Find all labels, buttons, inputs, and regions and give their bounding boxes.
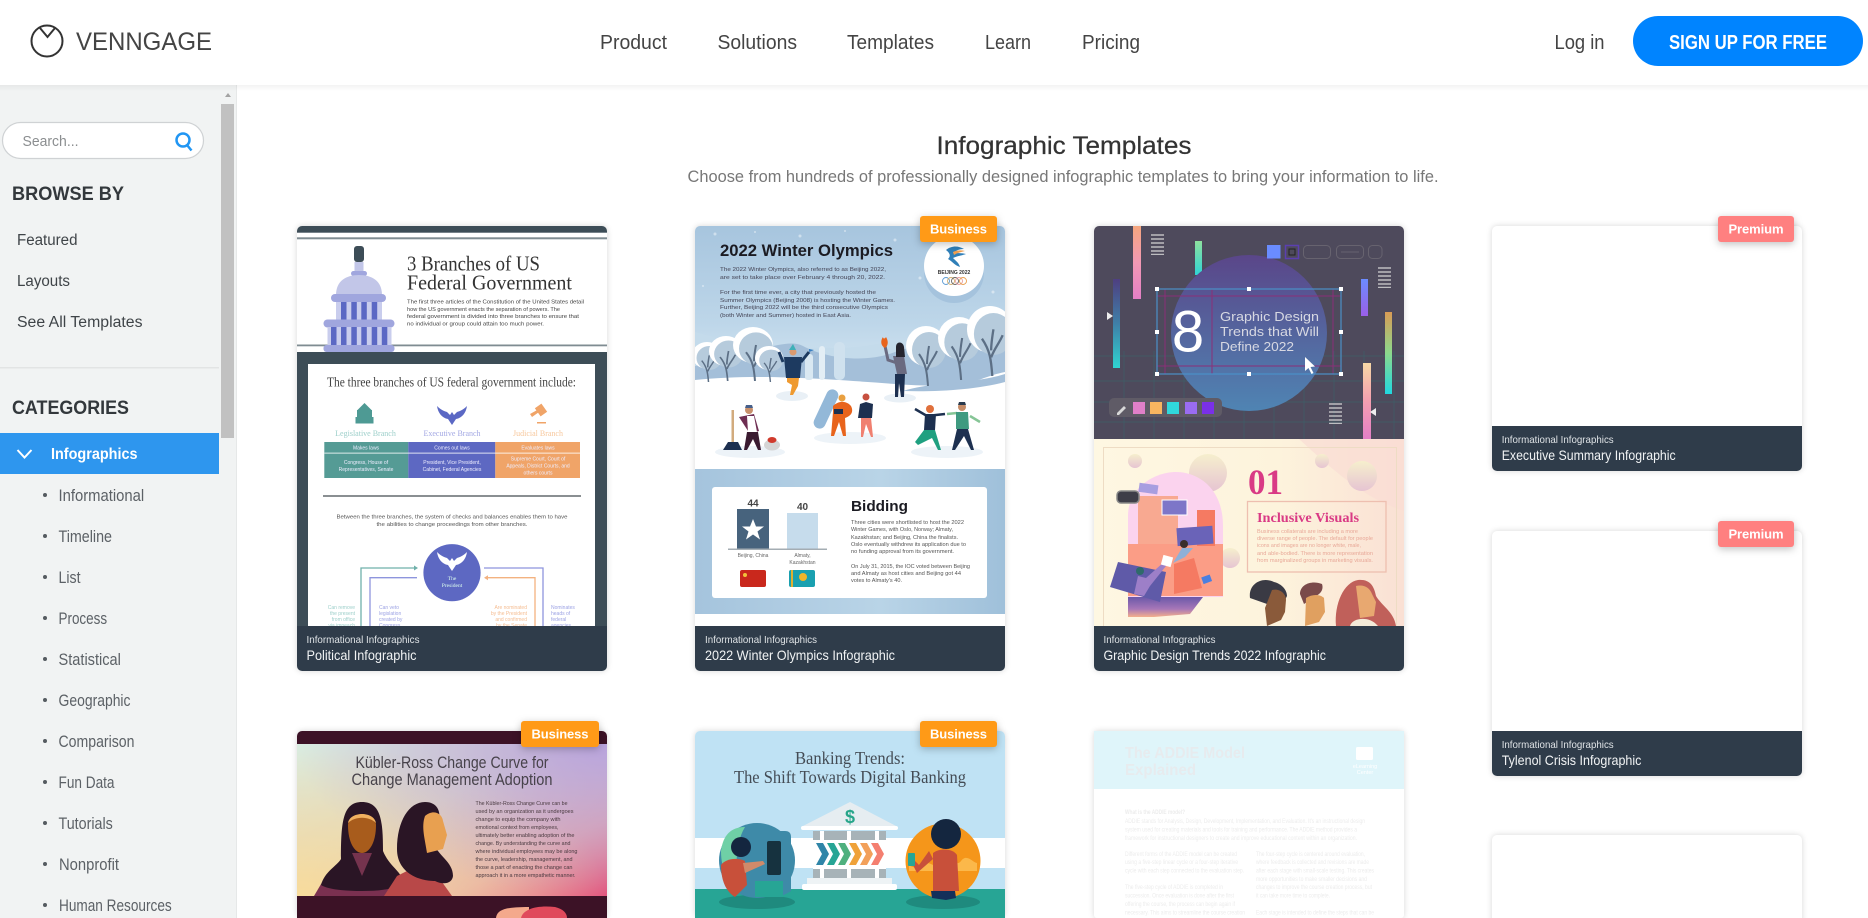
chevrons <box>816 843 884 865</box>
flow labels: via impeach <box>328 623 355 629</box>
poster body text: more opportunities to make smaller decisions and <box>1256 877 1367 883</box>
badge: premium <box>1718 521 1794 547</box>
poster body text: changes to improve the course creation process, but <box>1256 885 1372 891</box>
selection frame <box>1155 287 1343 376</box>
bidding text: Kazakhstan; and Beijing, China the finalists. <box>851 535 958 541</box>
branch labels: Judicial Branch <box>513 429 563 438</box>
heading: browse by: BROWSE BY <box>12 184 124 205</box>
badge: premium: Premium <box>1728 526 1784 542</box>
lower poster section <box>1094 439 1404 638</box>
icon: magnifier <box>176 134 192 150</box>
poster body text <box>1125 810 1375 916</box>
poster title: The ADDIE Model <box>1125 745 1245 762</box>
poster title <box>352 753 552 789</box>
poster title: 2022 Winter Olympics <box>720 241 893 260</box>
gradient disc <box>1171 255 1327 411</box>
flow labels: Congress <box>379 623 401 629</box>
poster title: 3 Branches of US <box>407 252 540 276</box>
caption: Informational Infographics <box>1502 434 1614 446</box>
flow labels: Can veto <box>379 605 399 611</box>
spheres <box>1128 454 1377 568</box>
browse links: Layouts <box>17 273 70 290</box>
poster paragraph: change. By understanding the curve and <box>476 841 571 847</box>
branch labels: Legislative Branch <box>335 429 396 438</box>
poster title: Banking Trends: <box>795 748 905 768</box>
page subtitle: Choose from hundreds of professionally designed infographic templates to bring your information to life. <box>688 167 1438 186</box>
hatch icons <box>1151 235 1391 424</box>
bar chart: Kazakhstan <box>789 560 816 566</box>
nav links: Templates <box>847 32 934 54</box>
curling player <box>715 405 785 458</box>
card art header <box>1094 731 1404 789</box>
sign up button: SIGN UP FOR FREE <box>1669 32 1827 54</box>
active category: infographics <box>0 433 219 474</box>
poster body text: succession. Once evaluation is done after the first <box>1125 894 1234 900</box>
flow labels: legislation <box>379 611 401 617</box>
poster intro text <box>720 267 895 319</box>
caption: Informational Infographics <box>306 634 420 646</box>
bidding text: and Almaty as host cities and Beijing got 44 <box>851 571 961 577</box>
poster body text: Different forms of the ADDIE model can be created <box>1125 852 1237 858</box>
caption <box>1492 731 1802 776</box>
customer at atm <box>719 823 795 898</box>
branch table: Comes out laws <box>434 446 470 452</box>
nav links: Product <box>600 32 667 54</box>
text box <box>1248 502 1386 572</box>
ground shadows <box>719 895 980 909</box>
logo wordmark: VENNGAGE <box>76 28 212 56</box>
woman in hood <box>314 802 403 896</box>
president circle: President <box>442 583 463 589</box>
nav links: Pricing <box>1082 32 1140 54</box>
flow labels: by the Senate <box>496 623 527 629</box>
badge: business <box>521 721 599 747</box>
caption: Tylenol Crisis Infographic <box>1502 752 1641 768</box>
top navigation bar <box>0 0 1868 91</box>
text box: Business collaterals are including a more <box>1257 529 1358 535</box>
poster title <box>734 748 966 787</box>
poster body text: The four-step cycle is centered around evaluation, <box>1256 852 1365 858</box>
branch labels <box>335 430 563 438</box>
poster title: Kübler-Ross Change Curve for <box>356 753 549 772</box>
portrait heads <box>1250 580 1396 626</box>
poster body text: cycle with each step connected to the evaluation step. <box>1125 868 1244 874</box>
category list: Timeline <box>58 528 112 546</box>
poster paragraph: used by an organization as it undergoes <box>476 809 574 815</box>
card: political infographic <box>297 226 607 671</box>
flow arrows <box>361 568 543 626</box>
beijing 2022 logo <box>924 236 984 303</box>
card art: change curve poster <box>297 731 607 918</box>
category list: Fun Data <box>58 774 115 792</box>
bidding text: votes to Almaty's 40. <box>851 578 902 584</box>
flow labels: federal <box>551 617 566 623</box>
colour palette <box>1109 398 1222 417</box>
bank building <box>801 802 898 890</box>
white content panel: The three branches of US federal government include: <box>327 374 576 390</box>
sign up button <box>1633 16 1863 66</box>
poster intro text: For the first time ever, a city that previously hosted the <box>720 290 876 296</box>
search box <box>2 122 204 158</box>
flow labels: agencies <box>551 623 572 629</box>
card art: design trends poster <box>1094 226 1404 638</box>
category list: Tutorials <box>58 815 113 833</box>
lower illustration fragment <box>496 906 567 918</box>
card: graphic design trends infographic <box>1094 226 1404 671</box>
checks and balances text: the abilities to change proceedings from other branches. <box>376 522 528 528</box>
trees <box>692 306 1013 386</box>
icon: capitol building <box>324 246 394 352</box>
category list: Informational <box>58 487 144 505</box>
branch table: Makes laws <box>353 446 380 452</box>
big numeral: 8 <box>1172 300 1204 364</box>
president circle: The <box>448 576 457 582</box>
branch table <box>324 442 580 478</box>
bar chart: Beijing, China <box>738 553 769 559</box>
nav links <box>600 32 1140 54</box>
browse links <box>17 232 143 331</box>
browse links: See All Templates <box>17 314 143 331</box>
white content panel <box>308 364 595 629</box>
branch table: Representatives, Senate <box>339 467 394 473</box>
poster paragraph: where individual employees may be along <box>476 849 578 855</box>
poster title: Graphic Design <box>1220 309 1319 324</box>
text box: and able-bodied. There is more representation <box>1257 551 1373 557</box>
caption <box>1094 626 1404 671</box>
poster intro text: no individual or group could attain too much power. <box>407 321 544 327</box>
poster paragraph: The Kübler-Ross Change Curve can be <box>476 801 568 807</box>
caption: Informational Infographics <box>705 634 817 646</box>
poster body text: ADDIE stands for Analysis, Design, Development, Implementation, and Evaluation. It's an instructional design <box>1125 819 1365 825</box>
poster body text: it can take more time to complete. <box>1256 894 1330 900</box>
bidding text: no funding approval from its government. <box>851 549 954 555</box>
torch bearer <box>881 337 916 402</box>
icon: elearning center <box>1353 747 1377 776</box>
checks and balances text <box>336 514 568 528</box>
poster paragraph: ultimately better enabling adoption of the <box>476 833 575 839</box>
bar chart: Almaty, <box>794 553 811 559</box>
poster intro text: The first three articles of the Constitution of the United States detail <box>407 300 584 306</box>
nav links: Solutions <box>718 32 797 54</box>
poster intro text: how the US government enacts the separation of powers. The <box>407 307 560 313</box>
poster body text: after each stage with small-scale testing. This creates <box>1256 868 1374 874</box>
poster intro text: Further, Beijing 2022 will be the third consecutive Olympics <box>720 305 888 311</box>
poster title <box>408 256 572 290</box>
poster title: Federal Government <box>407 270 572 294</box>
bidding text <box>851 520 970 584</box>
card: 2022 winter olympics infographic <box>692 216 1013 671</box>
bar chart <box>728 498 827 566</box>
category list: Geographic <box>58 692 130 710</box>
branch table: President, Vice President, <box>423 460 481 466</box>
caption <box>1492 426 1802 471</box>
poster body text: Each stage is intended to define the steps that can be <box>1256 910 1375 916</box>
caption: 2022 Winter Olympics Infographic <box>705 647 895 663</box>
icon: legislative <box>356 403 374 424</box>
card: ADDIE model (fading in) <box>1094 731 1404 918</box>
bank building: $ <box>845 807 855 827</box>
flow labels: from office <box>332 617 355 623</box>
flow labels: Can remove <box>328 605 355 611</box>
branch table: Appeals, District Courts, and <box>506 464 570 470</box>
checks and balances text: Between the three branches, the system of checks and balances enables them to have <box>336 514 568 520</box>
card: banking trends <box>695 721 1005 918</box>
president circle <box>423 544 481 601</box>
badge: premium <box>1718 216 1794 242</box>
poster intro text <box>407 300 584 327</box>
bidding text: Winter Games, with Oslo, Norway; Almaty, <box>851 527 953 533</box>
grid lines <box>1094 351 1404 439</box>
badge: business: Business <box>930 222 987 236</box>
badge: premium: Premium <box>1728 222 1784 236</box>
card: blank loading template <box>1492 835 1802 918</box>
card: kubler-ross change curve <box>297 721 607 918</box>
branch table: Supreme Court, Court of <box>511 456 566 462</box>
poster paragraph: those a part of enacting the change can <box>476 865 573 871</box>
category list: Nonprofit <box>59 856 119 874</box>
flow labels: the present <box>330 611 356 617</box>
flow labels: created by <box>379 617 403 623</box>
poster paragraph <box>476 801 578 879</box>
poster intro text: federal government is divided into three branches to ensure that <box>407 314 580 320</box>
card: executive summary infographic <box>1492 216 1802 471</box>
beijing 2022 logo: BEIJING 2022 <box>938 270 970 276</box>
sidebar <box>0 85 237 918</box>
bidding text: Oslo eventually withdrew its application due to <box>851 542 966 548</box>
skier with raised arms <box>776 344 814 401</box>
flow labels <box>328 605 575 626</box>
category list: Human Resources <box>59 897 172 915</box>
poster body text: system used for creating materials and tools for training and performance. The ADDIE method provides a <box>1125 828 1358 834</box>
caption: Graphic Design Trends 2022 Infographic <box>1104 647 1326 663</box>
snowy hills <box>695 344 1005 392</box>
icon: elearning center: eLearning <box>1353 764 1377 770</box>
poster body text: framework for instructional designers to create and improve educational content within an organization. <box>1125 836 1357 842</box>
flag: kazakhstan <box>789 570 815 587</box>
poster intro text: are set to take place over February 4 through 20, 2022. <box>720 275 886 281</box>
poster title: Explained <box>1125 762 1196 779</box>
flag: china <box>740 570 766 587</box>
caption: Informational Infographics <box>1104 634 1216 646</box>
heading: categories: CATEGORIES <box>12 398 129 419</box>
caption <box>695 626 1005 671</box>
poster body text: where feedback is collected and revisions are made <box>1255 860 1370 866</box>
snowboard pair <box>812 387 886 444</box>
poster body text: necessary. This aims to streamline the course creation <box>1125 910 1245 916</box>
badge: business: Business <box>532 726 588 742</box>
icon: judicial gavel <box>530 404 547 424</box>
icon: executive eagle <box>437 406 467 425</box>
bidding text: On July 31, 2015, the IOC voted between Beijing <box>851 564 970 570</box>
active category: infographics: Infographics <box>51 446 138 463</box>
caption: Executive Summary Infographic <box>1502 447 1676 463</box>
poster title <box>1220 309 1319 354</box>
text box: diverse range of people. The default for people <box>1257 536 1373 542</box>
badge: business: Business <box>930 726 987 742</box>
bar chart: 40 <box>797 502 808 513</box>
branch table: Congress, House of <box>344 460 389 466</box>
poster intro text: Summer Olympics (Beijing 2008) is hosting the Winter Games. <box>720 298 895 304</box>
category list: List <box>58 569 81 587</box>
caption: Political Infographic <box>306 647 416 663</box>
poster title: Define 2022 <box>1220 339 1294 354</box>
gradient bars <box>1113 226 1392 439</box>
poster body text: offering the course, the process can begin again if <box>1125 902 1235 908</box>
poster title: The Shift Towards Digital Banking <box>734 767 966 787</box>
browse links: Featured <box>17 232 78 249</box>
category list <box>43 487 172 915</box>
branch table: others courts <box>524 470 553 476</box>
poster paragraph: the curve, leadership, management, and <box>476 857 573 863</box>
poster title <box>1125 745 1245 779</box>
icon: venngage logo <box>32 26 62 56</box>
icon: elearning center: Center <box>1357 770 1373 776</box>
category list: Statistical <box>58 651 121 669</box>
people and screens illustration <box>1110 472 1223 617</box>
toolbar <box>1267 245 1382 258</box>
flow labels: and confirmed <box>495 617 527 623</box>
bar chart: 44 <box>747 498 759 510</box>
card art: banking poster <box>695 731 1005 918</box>
flow labels: Nominates <box>551 605 575 611</box>
woman with long hair <box>384 802 453 896</box>
flow labels: Are nominated <box>494 605 527 611</box>
poster paragraph: change to equip the company with <box>476 817 561 823</box>
branch table: Cabinet, Federal Agencies <box>423 467 482 473</box>
poster paragraph: emotional context from employees, <box>476 825 558 831</box>
poster body text: using a five-step linear cycle or a four-step iterative <box>1125 860 1239 866</box>
poster intro text: (both Winter and Summer) hosted in East Asia. <box>720 313 851 319</box>
log in link: Log in <box>1554 32 1604 54</box>
icon: cursor <box>1305 357 1315 374</box>
scrollbar <box>221 93 234 438</box>
page title: Infographic Templates <box>936 132 1192 160</box>
bidding panel <box>695 469 1005 626</box>
caption: Informational Infographics <box>1502 739 1614 751</box>
branch table: Evaluates laws <box>521 446 555 452</box>
category list: Process <box>58 610 107 628</box>
poster body text: What is the ADDIE model? <box>1125 810 1185 816</box>
category list: Comparison <box>58 733 134 751</box>
skating pair <box>911 402 983 458</box>
text box: icons and images are no longer white, male, <box>1257 543 1361 549</box>
card: tylenol crisis infographic <box>1492 521 1802 776</box>
numeral 01: 01 <box>1248 462 1283 502</box>
branch labels: Executive Branch <box>423 429 481 438</box>
search box: Search... <box>22 133 78 150</box>
poster title: Change Management Adoption <box>352 770 552 789</box>
ice towers <box>805 342 845 380</box>
bidding heading: Bidding <box>851 498 908 515</box>
flow labels: by the President <box>491 611 528 617</box>
nav links: Learn <box>985 32 1031 54</box>
poster paragraph: approach it in a more empathetic manner. <box>476 873 576 879</box>
card art: winter olympics poster <box>692 226 1013 626</box>
badge: business <box>920 216 997 242</box>
badge: business <box>920 721 997 747</box>
poster intro text: The 2022 Winter Olympics, also referred to as Beijing 2022, <box>720 267 886 273</box>
flow labels: heads of <box>551 611 571 617</box>
text box: from marginalized groups in marketing visuals. <box>1257 558 1373 564</box>
bidding text: Three cities were shortlisted to host the 2022 <box>851 520 964 526</box>
poster title: Trends that Will <box>1220 324 1319 339</box>
caption <box>297 626 607 671</box>
customer with phone <box>906 819 980 900</box>
text box: Inclusive Visuals <box>1257 510 1359 525</box>
poster body text: The five-step cycle of ADDIE is completed in <box>1125 885 1223 891</box>
card art: 3 branches of US federal government <box>297 226 607 629</box>
